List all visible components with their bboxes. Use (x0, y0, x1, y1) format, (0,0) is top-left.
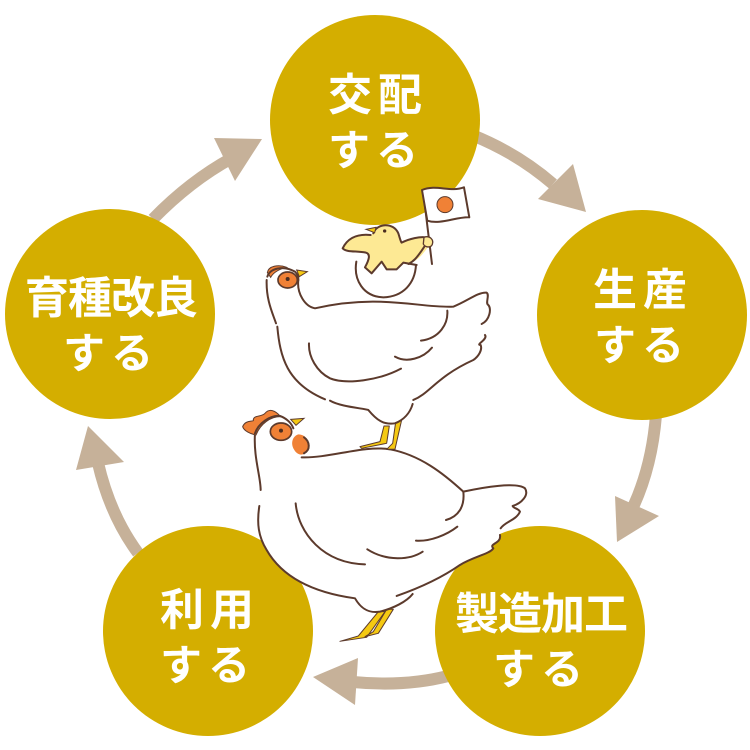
egg shell (356, 262, 416, 297)
lower hen eye (270, 423, 292, 440)
illustration: lower hen (243, 410, 526, 641)
upper hen eye (278, 272, 297, 288)
lower hen beak (291, 418, 304, 425)
circle: production: する (594, 322, 690, 369)
upper hen beak (297, 270, 307, 277)
lower hen comb (243, 410, 281, 435)
circle: use (103, 526, 313, 736)
circle: mating: 交配 (328, 71, 428, 120)
lower hen body (255, 419, 526, 612)
arrow: breeding to mating (153, 138, 262, 219)
upper hen comb (267, 266, 287, 277)
circle: mating: する (328, 127, 424, 174)
circle: use: 利用 (160, 586, 260, 635)
illustration: upper hen, chick and flag (267, 187, 491, 449)
circle: processing: 製造加工 (455, 590, 627, 639)
upper hen legs (360, 420, 402, 449)
arrow: processing to use (313, 658, 448, 705)
circle: processing: する (493, 646, 589, 693)
circle: breeding: する (63, 330, 159, 377)
arrow: production to processing (615, 415, 659, 542)
circle: use: する (160, 642, 256, 689)
circle: breeding: 育種改良 (25, 274, 197, 323)
circle: breeding (5, 209, 215, 419)
flag (422, 187, 469, 264)
chick (343, 225, 431, 273)
circle: production (537, 210, 747, 420)
circle: processing (435, 526, 645, 736)
arrow: use to breeding (76, 426, 138, 553)
circle: production: 生産 (593, 266, 693, 315)
arrow: mating to production (472, 135, 586, 212)
chick beak (366, 227, 376, 233)
upper hen body (267, 270, 491, 424)
lower hen legs (340, 609, 393, 641)
circle: mating (270, 15, 480, 225)
lower hen wattle (292, 434, 309, 455)
